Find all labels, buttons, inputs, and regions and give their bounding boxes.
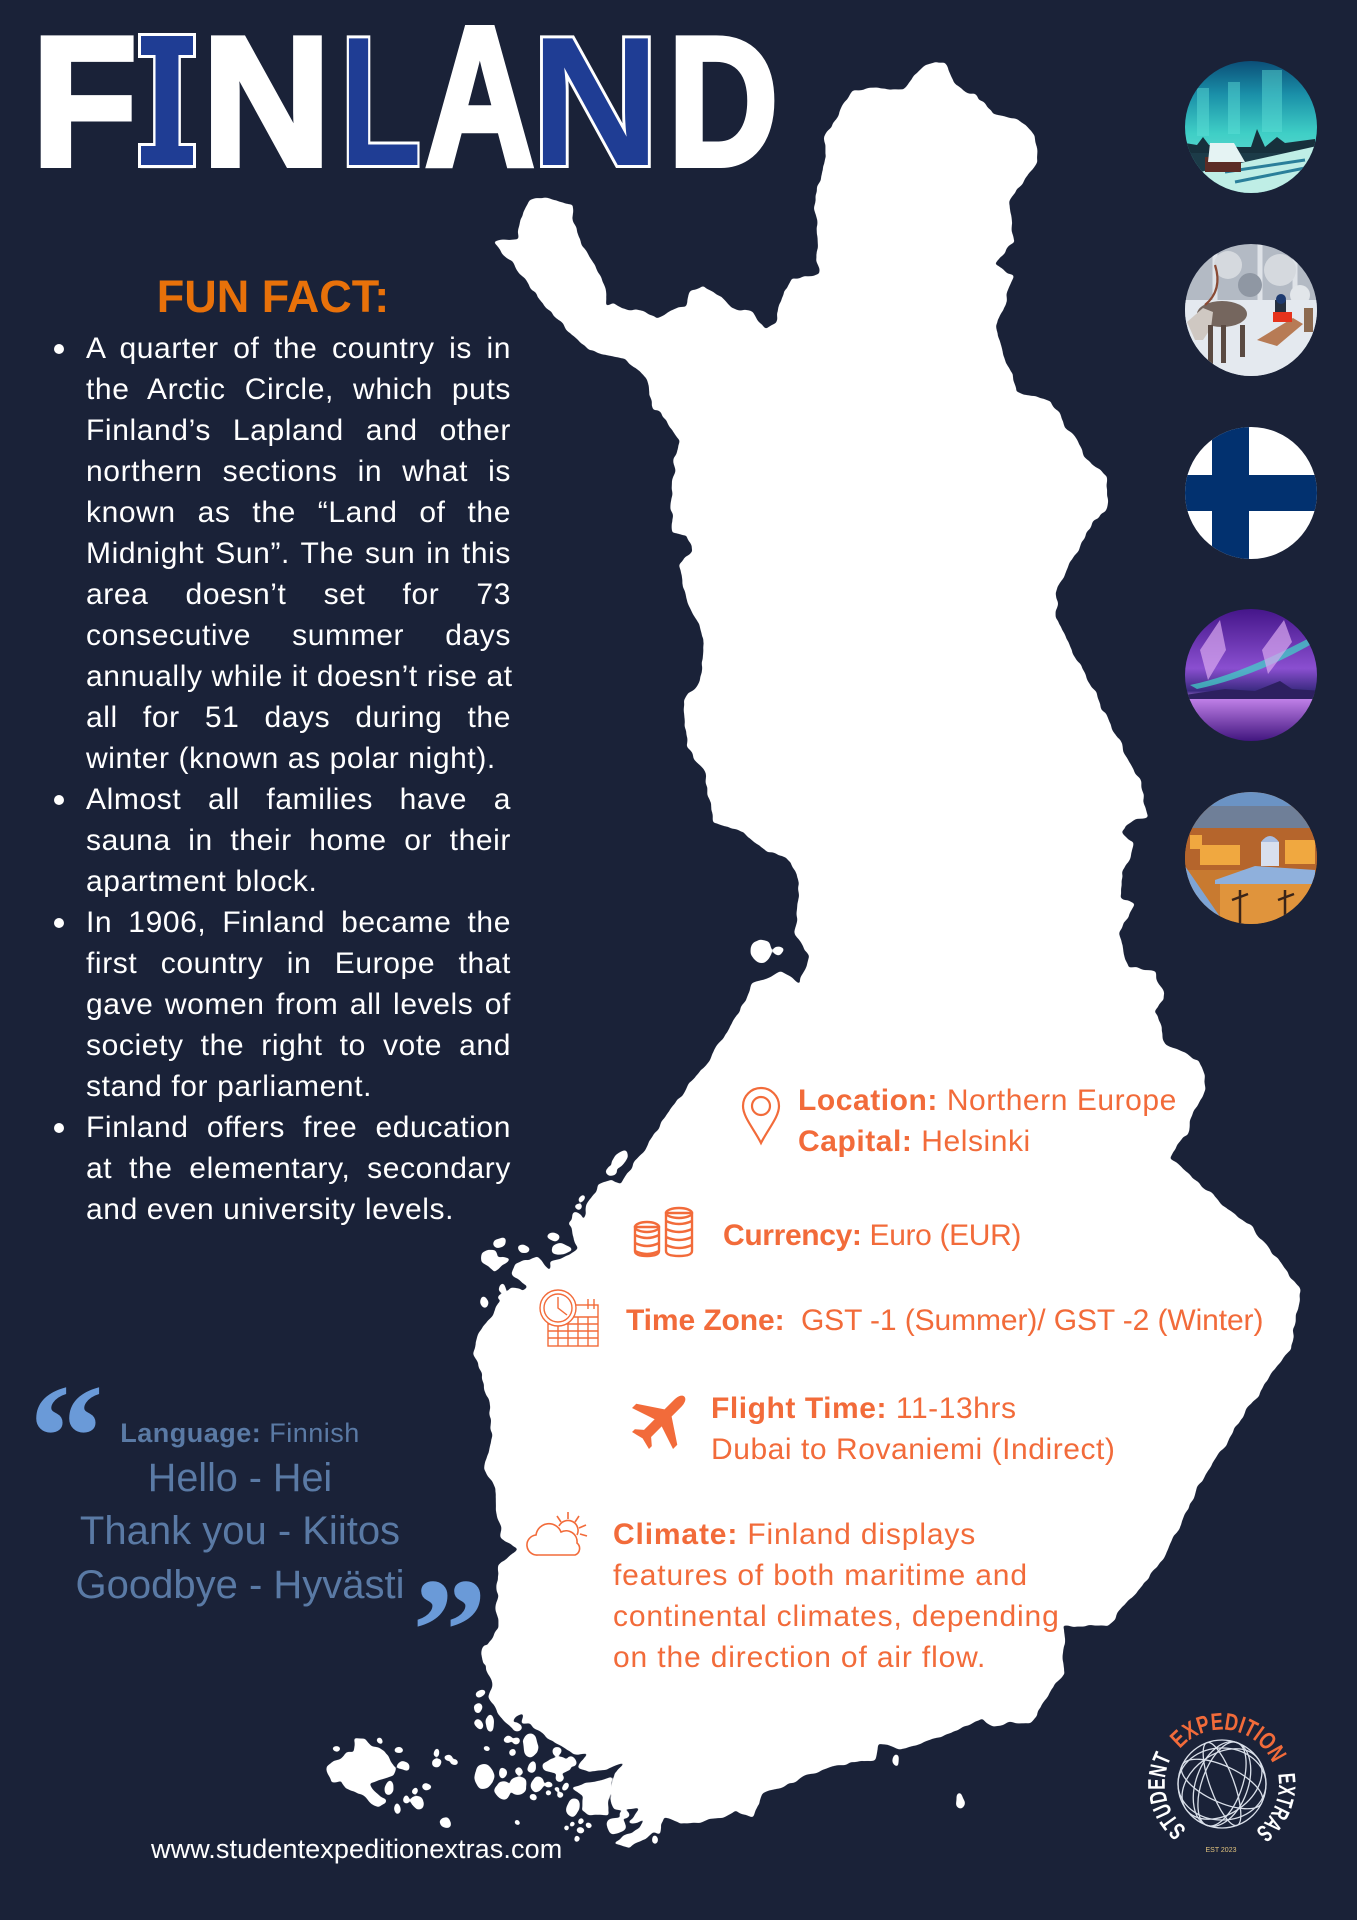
text: flight time — [711, 1392, 1115, 1466]
title: FINLAND: L — [340, 0, 421, 200]
title: FINLAND: N — [531, 0, 660, 200]
text: flight time: Dubai to Rovaniemi (Indirect) — [711, 1433, 1115, 1466]
text block: fun fact bullets: Finland offers free education — [86, 1111, 511, 1144]
text block: fun fact bullets: A quarter of the country is in — [86, 332, 511, 365]
text block: fun fact bullets: known as the “Land of the — [86, 496, 511, 529]
panel: language phrases — [75, 1418, 405, 1607]
logo: Student Expedition Extras: STUDENT — [1148, 1750, 1185, 1840]
text block: fun fact bullets: the Arctic Circle, which puts — [86, 373, 511, 406]
title: FINLAND: F — [32, 0, 137, 200]
text: thank you: Thank you - Kiitos — [80, 1509, 400, 1553]
text: flight time: Flight Time: 11-13hrs — [711, 1392, 1017, 1425]
text block: fun fact bullets: apartment block. — [86, 865, 317, 898]
photo circles column — [1185, 61, 1317, 924]
text block: fun fact bullets: Finland’s Lapland and other — [86, 414, 511, 447]
icon: coins — [634, 1206, 694, 1258]
text: climate — [613, 1518, 1060, 1674]
title: FINLAND: D — [668, 0, 778, 200]
text: climate: continental climates, depending — [613, 1600, 1060, 1633]
text: climate: on the direction of air flow. — [613, 1641, 986, 1674]
icon: sun and cloud — [526, 1512, 588, 1556]
photo: aurora over snowy cabin — [1185, 61, 1317, 196]
text: location and capital — [798, 1084, 1177, 1158]
text block: fun fact bullets: all for 51 days during the — [86, 701, 511, 734]
photo: reindeer sleigh — [1185, 244, 1317, 377]
icon: airplane — [632, 1396, 686, 1449]
icon: Finnish flag — [1185, 427, 1317, 559]
heading: fun fact: FUN FACT: — [157, 271, 389, 322]
text block: fun fact bullets: at the elementary, secondary — [86, 1152, 511, 1185]
text block: fun fact bullets: In 1906, Finland became the — [86, 906, 511, 939]
text block: fun fact bullets: Midnight Sun”. The sun in this — [86, 537, 511, 570]
logo: Student Expedition Extras: EXTRAS — [1257, 1774, 1296, 1842]
text block: fun fact bullets: society the right to vote and — [86, 1029, 511, 1062]
icon: clock and calendar — [539, 1289, 599, 1347]
text: currency: Currency: Euro (EUR) — [723, 1219, 1021, 1252]
text: location and capital: Capital: Helsinki — [798, 1125, 1031, 1158]
text block: fun fact bullets: area doesn’t set for 73 — [86, 578, 511, 611]
text block: fun fact bullets: gave women from all levels of — [86, 988, 511, 1021]
text block: fun fact bullets: winter (known as polar night). — [86, 742, 496, 775]
photo: purple aurora — [1185, 609, 1322, 741]
text block: fun fact bullets — [54, 332, 513, 1226]
text: location and capital: Location: Northern Europe — [798, 1084, 1177, 1117]
text block: fun fact bullets: Almost all families have a — [86, 783, 511, 816]
logo: Student Expedition Extras: EST 2023 — [1205, 1847, 1237, 1854]
text block: fun fact bullets: and even university levels. — [86, 1193, 454, 1226]
icon: location pin — [742, 1086, 780, 1146]
text block: fun fact bullets: annually while it doesn’t rise at — [86, 660, 513, 693]
text: goodbye: Goodbye - Hyvästi — [75, 1563, 405, 1607]
text block: fun fact bullets: northern sections in what is — [86, 455, 511, 488]
title: FINLAND — [32, 0, 778, 200]
photo: Helsinki winter cityscape — [1185, 792, 1317, 924]
text: language: Language: Finnish — [120, 1418, 360, 1448]
text block: fun fact bullets: first country in Europe that — [86, 947, 511, 980]
title: FINLAND: N — [202, 0, 331, 200]
text: climate: features of both maritime and — [613, 1559, 1028, 1592]
logo: Student Expedition Extras: EXPEDITION — [1169, 1712, 1287, 1762]
text block: fun fact bullets: stand for parliament. — [86, 1070, 372, 1103]
text: hello: Hello - Hei — [148, 1456, 332, 1500]
text: time zone: Time Zone: GST -1 (Summer)/ GST -2 (Winter) — [626, 1304, 1263, 1337]
text block: fun fact bullets: sauna in their home or their — [86, 824, 511, 857]
text block: fun fact bullets: consecutive summer days — [86, 619, 511, 652]
text: climate: Climate: Finland displays — [613, 1518, 976, 1551]
website url: www.studentexpeditionextras.com — [151, 1834, 562, 1864]
